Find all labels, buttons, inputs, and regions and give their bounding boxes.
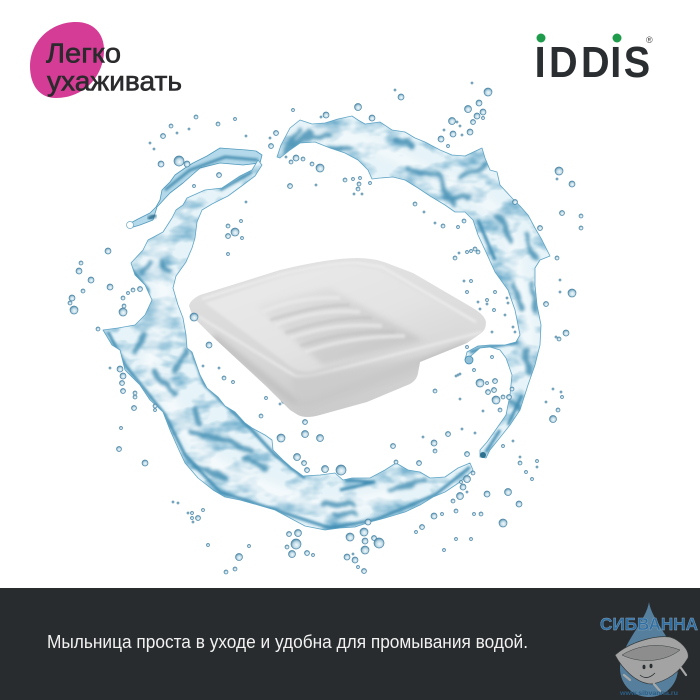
badge heading: ухаживать bbox=[47, 66, 182, 96]
dish body bbox=[189, 258, 486, 417]
brand name: СИБВАННА bbox=[600, 614, 698, 634]
upper and right water stream bbox=[270, 110, 560, 465]
bar background bbox=[0, 588, 700, 700]
bathtub bbox=[615, 637, 688, 691]
logo dot right bbox=[612, 34, 622, 42]
pink blob bbox=[30, 22, 104, 98]
water droplets bbox=[68, 82, 583, 574]
soap dish bbox=[189, 258, 486, 417]
upper left strand bbox=[126, 148, 262, 228]
dish interior bbox=[200, 268, 480, 403]
caption: Мыльница проста в уходе и удобна для промывания водой. bbox=[47, 632, 528, 652]
badge: easy to care for bbox=[30, 22, 182, 98]
bottom dark bar bbox=[0, 588, 700, 700]
water splash ring bbox=[68, 82, 583, 574]
water drop over dish corner bbox=[190, 313, 198, 321]
watermark logo: Sibvanna bbox=[600, 602, 698, 697]
logo wordmark: IDDIS bbox=[535, 37, 650, 86]
website: www.sibvanna.ru bbox=[619, 691, 678, 697]
water drop bbox=[620, 602, 678, 697]
registered mark: ® bbox=[646, 35, 653, 45]
logo: IDDIS bbox=[535, 34, 653, 86]
left and bottom water stream bbox=[95, 150, 480, 535]
badge heading: Легко bbox=[46, 38, 121, 68]
logo dot left bbox=[536, 34, 546, 42]
soap tray with ridges bbox=[269, 292, 418, 364]
